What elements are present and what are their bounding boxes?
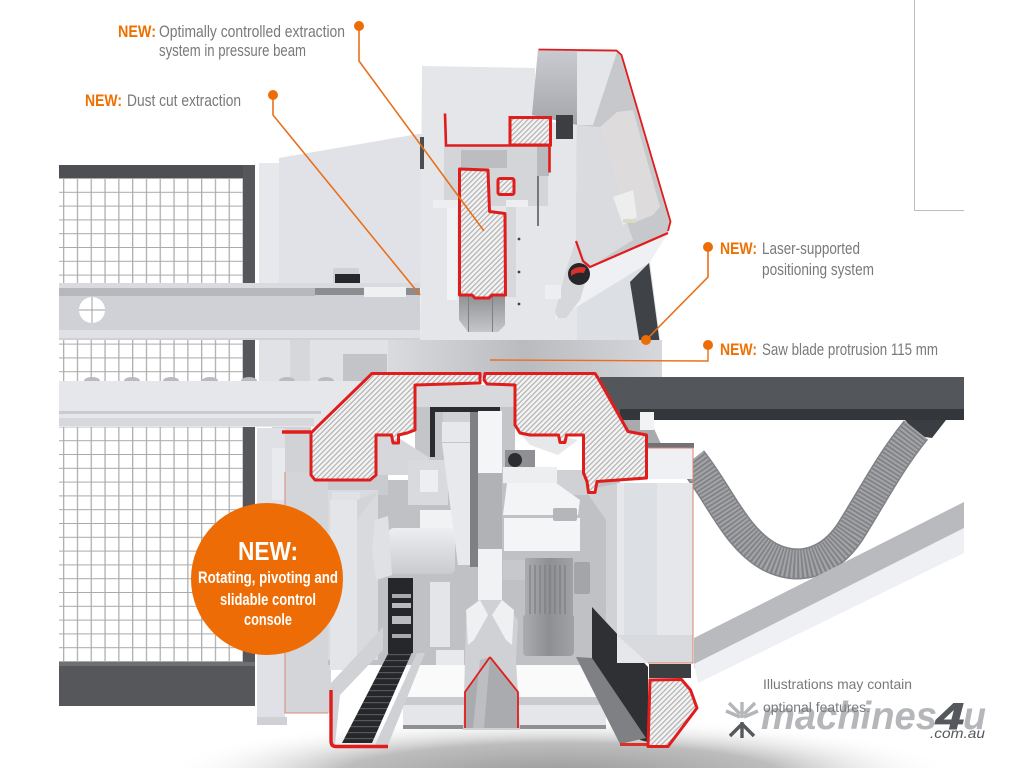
middle crossbeam (59, 283, 420, 340)
label: dust cut extraction: NEW: (85, 92, 122, 110)
label: dust cut extraction: Dust cut extraction (127, 92, 241, 110)
right chamber (617, 448, 693, 678)
callout circle: control console: Rotating, pivoting and (198, 568, 338, 587)
label: laser-supported positioning (720, 240, 874, 279)
watermark logo (726, 695, 986, 741)
safety fence with wire mesh (59, 165, 255, 706)
label: optimally controlled extraction: Optimally controlled extraction (159, 23, 345, 41)
label: laser-supported positioning: Laser-supported (762, 240, 860, 258)
right dark side panel (576, 607, 648, 746)
label: saw blade protrusion: Saw blade protrusion 115 mm (762, 341, 938, 359)
watermark logo: 4 (935, 696, 964, 737)
machine interior (328, 385, 620, 670)
extraction hose (692, 430, 916, 564)
red outlines (282, 50, 670, 746)
callout line: saw blade protrusion (490, 340, 713, 361)
hatched cross-section: left table section (311, 374, 480, 480)
disclaimer note: optional features. (763, 699, 870, 715)
callout circle: control console (191, 503, 343, 655)
center extraction funnel (463, 600, 520, 730)
callout line: dust cut extraction (268, 90, 420, 295)
watermark logo: u (963, 695, 986, 738)
hatched cross-section: lower right section (648, 680, 697, 746)
disclaimer note: Illustrations may contain (763, 676, 912, 692)
watermark logo: machines (761, 695, 937, 738)
right side panel and dark backing (577, 125, 660, 345)
callout circle: control console: console (244, 610, 292, 629)
hatched cross-section: top bracket (445, 114, 550, 172)
drag chain (342, 578, 413, 743)
label: optimally controlled extraction: system in pressure beam (159, 42, 306, 60)
label: saw blade protrusion: NEW: (720, 341, 757, 359)
diagonal support beam (694, 502, 964, 683)
electric motor (523, 558, 590, 656)
left trough (331, 627, 425, 745)
watermark logo: .com.au (930, 725, 985, 741)
left table beam (59, 377, 365, 427)
callout circle: control console: slidable control (220, 590, 316, 609)
label: dust cut extraction (85, 92, 241, 110)
label: optimally controlled extraction (118, 23, 345, 60)
floor shadow (160, 716, 960, 768)
callout line: pressure beam extraction (354, 21, 484, 231)
bracket below dark beam (610, 412, 694, 448)
frame outline top right (914, 0, 964, 210)
disclaimer note (763, 676, 912, 715)
right dark table beam (600, 377, 964, 438)
base block under column (388, 340, 662, 378)
left chamber (257, 427, 331, 725)
label: optimally controlled extraction: NEW: (118, 23, 156, 41)
callout line: laser positioning (641, 242, 713, 345)
hatched cross-section: small square (498, 178, 514, 194)
label: laser-supported positioning: positioning system (762, 261, 874, 279)
main upright panel (420, 66, 577, 342)
hood (532, 50, 671, 320)
hatched cross-section: pressure beam (460, 169, 506, 298)
callout circle: control console: NEW: (238, 536, 298, 566)
label: laser-supported positioning: NEW: (720, 240, 757, 258)
saw blade assembly and motors (372, 411, 580, 675)
rear post and back plate (259, 134, 422, 382)
label: saw blade protrusion (720, 341, 938, 359)
floor crossmembers (403, 665, 606, 729)
hatched cross-section: right table section (484, 374, 646, 492)
